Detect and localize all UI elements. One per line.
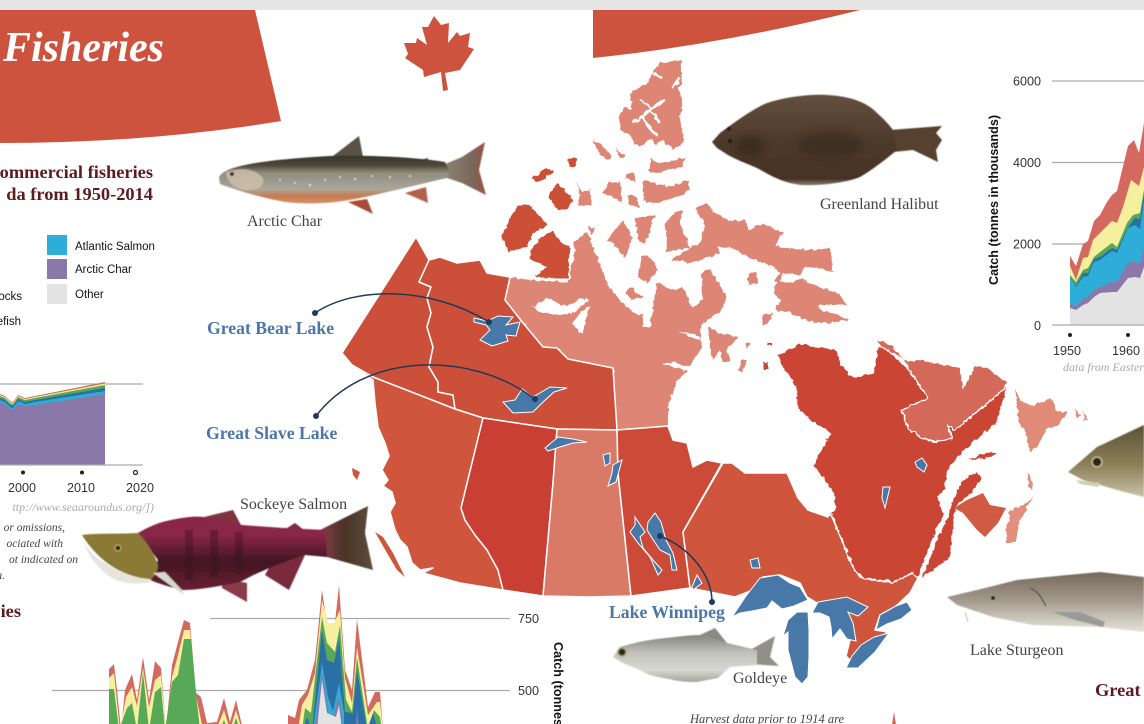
NWT Arctic islands <box>502 158 577 280</box>
left chart note: ociated with <box>6 538 63 550</box>
Nova Scotia <box>1006 473 1033 543</box>
Lake Nipigon <box>750 558 760 568</box>
Labrador <box>877 340 1008 442</box>
right stacked area chart: 0 <box>1034 319 1041 333</box>
heading fragment: fisheries: ies <box>1 601 21 621</box>
Caniapiscau reservoir <box>915 458 927 472</box>
Lake of the Woods <box>692 575 702 590</box>
label: Sockeye Salmon: Sockeye Salmon <box>240 496 347 513</box>
Newfoundland <box>1015 388 1088 452</box>
right stacked area chart: 1950 <box>1053 344 1081 358</box>
Lake Erie <box>846 633 889 668</box>
label: Arctic Char: Arctic Char <box>247 213 323 230</box>
Alberta <box>461 418 557 596</box>
right banner <box>593 10 860 58</box>
Yukon <box>342 237 455 409</box>
callout: Great Slave Lake <box>206 365 538 443</box>
small chart spike <box>892 712 896 724</box>
bottom stacked area chart <box>52 585 565 724</box>
chart legend: Arctic Char <box>75 264 132 276</box>
chart legend: Atlantic Salmon <box>75 241 155 253</box>
subheading: commercial fisheries: da from 1950-2014 <box>6 184 153 204</box>
fish: Arctic Char <box>219 136 486 214</box>
Lake Manitoba <box>630 517 662 575</box>
British Columbia <box>352 365 503 590</box>
chart legend <box>0 235 155 328</box>
Lake Athabasca <box>545 437 587 451</box>
subheading: commercial fisheries: ommercial fisheries <box>0 162 153 182</box>
title: Fisheries <box>2 25 164 71</box>
left stacked area chart: 2010 <box>67 481 95 495</box>
bottom chart right series <box>288 585 383 724</box>
New Brunswick <box>954 493 1006 537</box>
callout: Great Slave Lake: Great Slave Lake <box>206 423 337 443</box>
bottom chart left series <box>109 620 243 724</box>
Nunavut inlets <box>533 298 703 370</box>
right stacked area chart <box>987 74 1144 358</box>
callout: Great Bear Lake: Great Bear Lake <box>207 318 334 338</box>
bottom stacked area chart: 500 <box>518 684 539 698</box>
Arctic island fjords <box>633 73 680 137</box>
Quebec <box>763 343 1008 582</box>
icon: maple leaf <box>404 16 474 91</box>
left chart source: ttp://www.seaaroundus.org/]) <box>12 500 154 514</box>
Lake Mistassini <box>882 487 890 508</box>
callout: Great Bear Lake <box>207 294 492 338</box>
title banner <box>0 10 281 143</box>
right stacked area chart: 2000 <box>1013 238 1041 252</box>
right stacked area chart: 4000 <box>1013 156 1041 170</box>
right stacked area chart: 1960 <box>1112 344 1140 358</box>
Great Bear Lake shape <box>474 316 520 346</box>
left chart note <box>0 522 78 582</box>
bottom stacked area chart: Catch (tonnes <box>551 642 565 724</box>
left stacked area chart: 2000 <box>8 481 36 495</box>
left chart note: ot indicated on <box>9 554 78 566</box>
left stacked area chart <box>0 382 154 495</box>
fish: Lake Sturgeon <box>947 572 1144 632</box>
right stacked area chart: Catch (tonnes in thousands) <box>987 115 1001 285</box>
Lake Ontario <box>876 602 912 630</box>
fish: Sockeye Salmon <box>82 506 373 602</box>
left chart note: or omissions, <box>4 522 65 534</box>
label: Greenland Halibut: Greenland Halibut <box>820 196 939 213</box>
right chart gridlines <box>1052 81 1144 244</box>
top grey bar <box>0 0 1144 10</box>
Nunavut and Arctic islands <box>505 60 850 430</box>
subheading: commercial fisheries <box>0 162 153 204</box>
bottom stacked area chart: 750 <box>518 612 539 626</box>
Ontario <box>683 463 918 660</box>
Lake Superior <box>732 575 808 617</box>
map of Canada <box>342 60 1088 684</box>
chart legend: Other <box>75 289 104 301</box>
label: Lake Sturgeon: Lake Sturgeon <box>970 642 1063 659</box>
Lake Michigan <box>783 612 809 684</box>
heading fragment: Great: Great <box>1095 680 1141 700</box>
Manitoba <box>617 426 722 596</box>
left stacked area chart: 2020 <box>126 481 154 495</box>
lakes <box>474 316 927 684</box>
fish: right edge fish <box>1068 425 1144 497</box>
Reindeer Lake <box>603 453 610 466</box>
callout: Lake Winnipeg <box>609 533 725 622</box>
right stacked area chart: 6000 <box>1013 74 1041 88</box>
Lake Huron <box>812 597 868 641</box>
Lake Winnipeg shape <box>647 513 677 570</box>
Saskatchewan <box>543 429 631 597</box>
label: Goldeye: Goldeye <box>733 670 787 687</box>
callout: Lake Winnipeg: Lake Winnipeg <box>609 602 725 622</box>
fish: Greenland Halibut <box>712 95 942 185</box>
Northwest Territories <box>419 158 617 430</box>
fish: Goldeye <box>613 628 779 682</box>
Great Slave Lake shape <box>503 387 567 413</box>
